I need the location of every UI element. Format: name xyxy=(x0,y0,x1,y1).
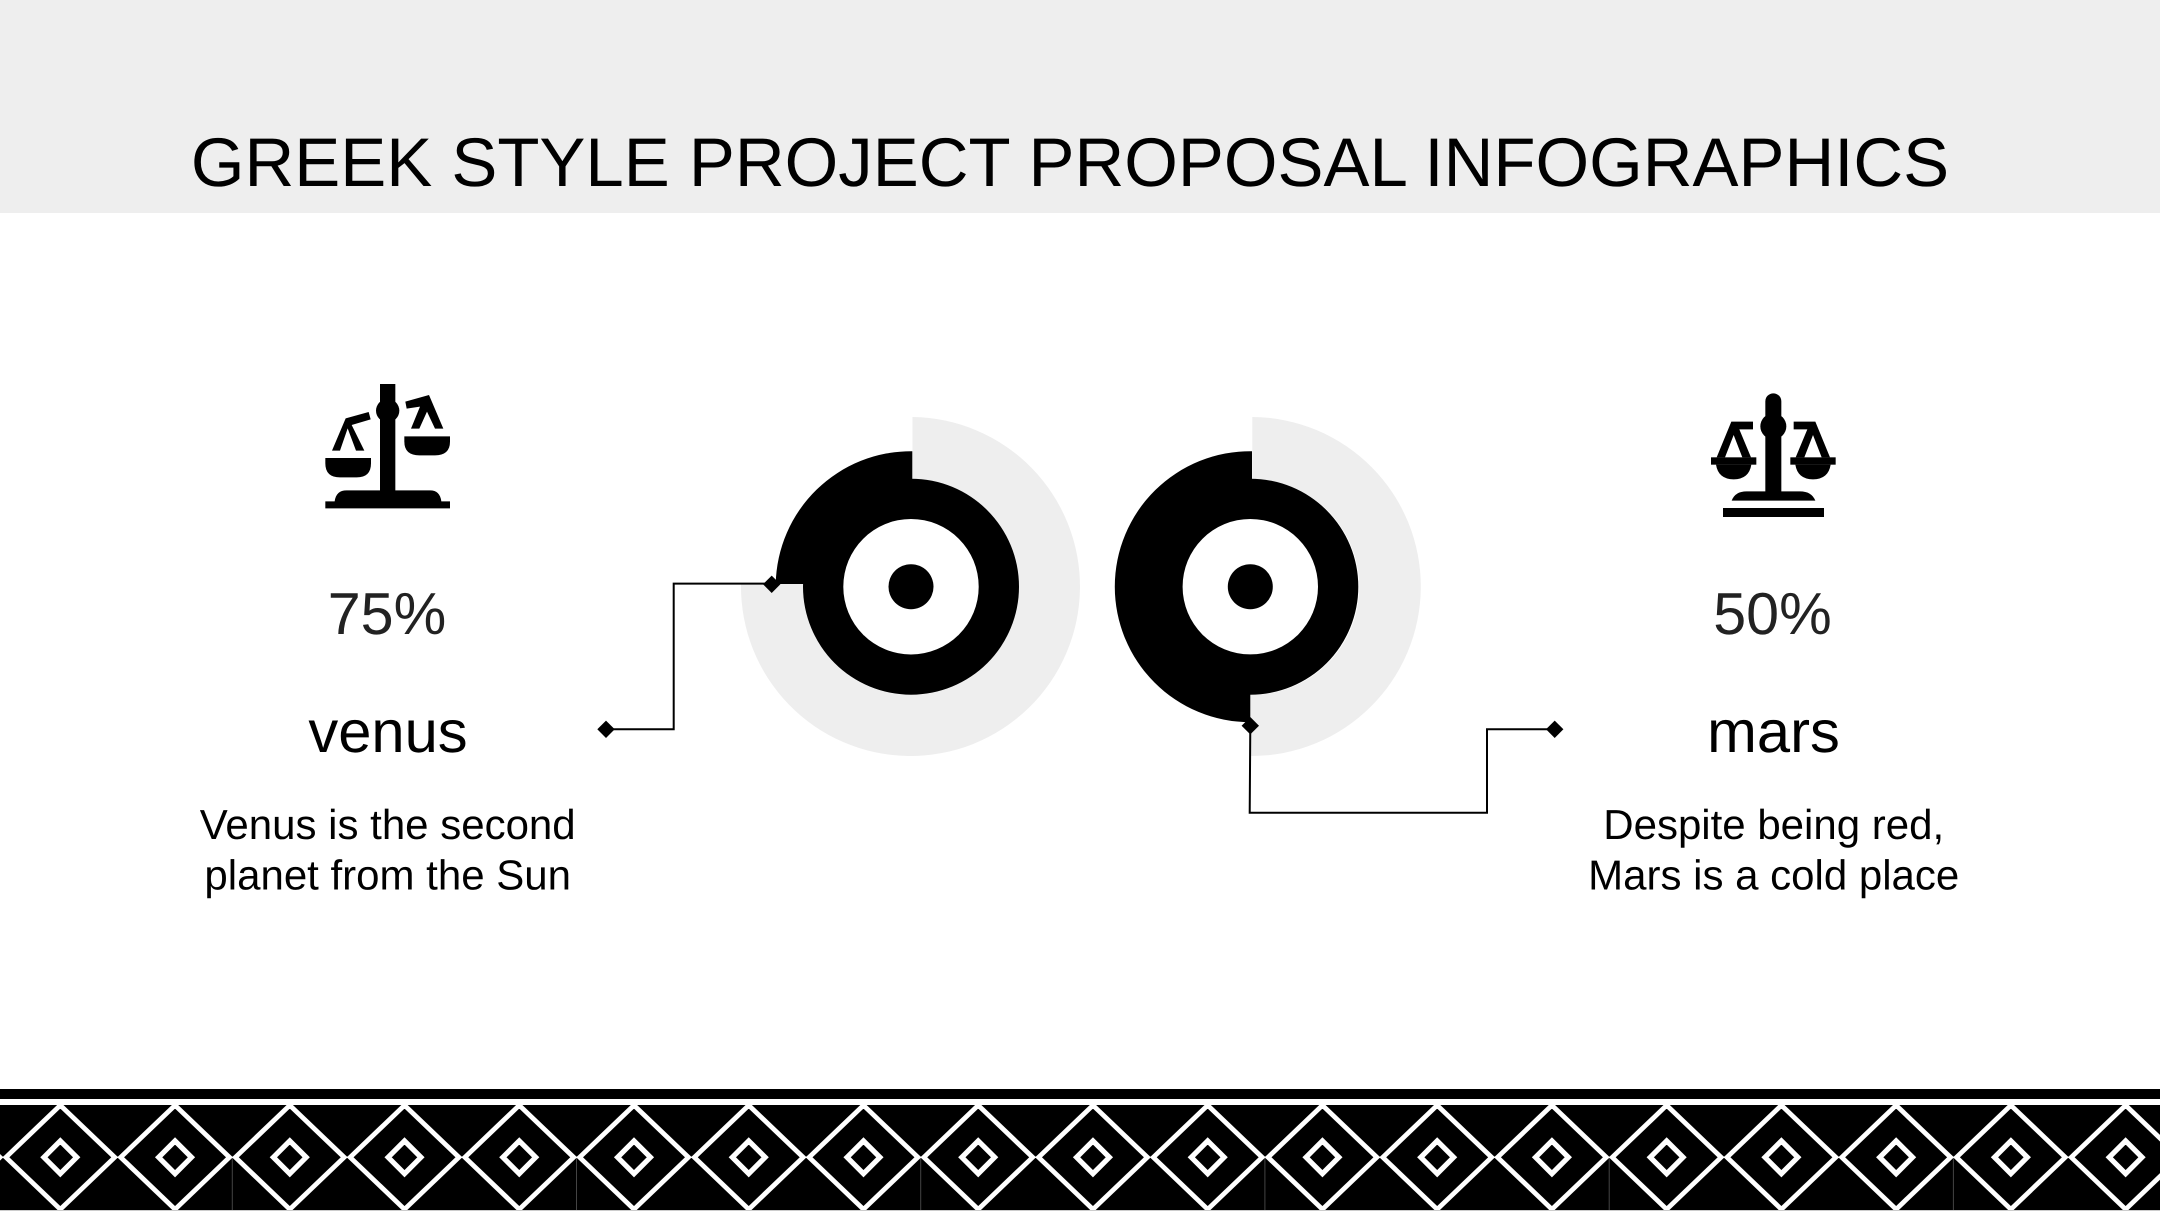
panel: venus xyxy=(200,384,576,898)
venus description: Venus is the second xyxy=(200,801,576,848)
centre dot xyxy=(888,564,934,609)
venus description: planet from the Sun xyxy=(204,852,571,898)
mars description: Mars is a cold place xyxy=(1588,852,1959,898)
chart: 75% donut xyxy=(741,417,1080,756)
connector: mars xyxy=(1242,717,1563,813)
panel: mars xyxy=(1588,393,1959,898)
footer band: greek key diamonds xyxy=(0,1089,2160,1211)
venus percentage: 75% xyxy=(328,580,446,647)
title: GREEK STYLE PROJECT PROPOSAL INFOGRAPHICS xyxy=(191,124,1949,201)
grey track 50% xyxy=(1250,417,1421,756)
mars heading: mars xyxy=(1707,698,1840,765)
chart: 50% donut xyxy=(1115,417,1421,756)
header background xyxy=(0,0,2160,213)
black inner ring xyxy=(803,479,1019,695)
grey track 75% xyxy=(741,417,1080,756)
black inner ring xyxy=(1142,479,1358,695)
venus heading: venus xyxy=(308,698,468,765)
black outer arc 50% xyxy=(1115,451,1252,722)
centre dot xyxy=(1228,564,1273,609)
mars percentage: 50% xyxy=(1713,580,1832,647)
black outer arc 25% xyxy=(776,451,912,584)
connector: venus xyxy=(597,576,780,738)
icon: tilted scales xyxy=(325,384,450,508)
mars description: Despite being red, xyxy=(1603,801,1944,848)
icon: balanced scales xyxy=(1711,393,1836,517)
